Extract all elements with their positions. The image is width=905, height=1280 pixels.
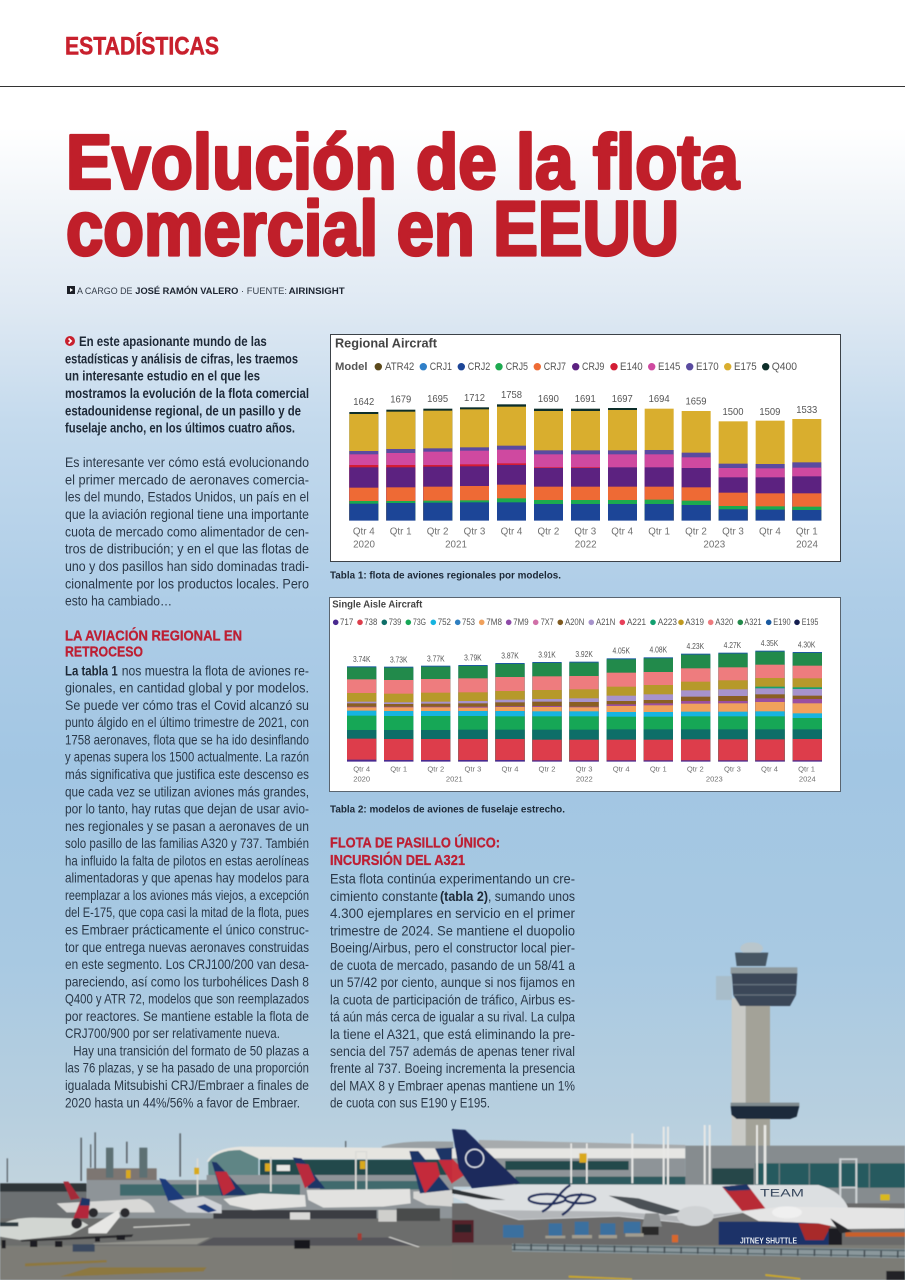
body text: opening paragraph: tros de distribución; y en el que las flotas de — [65, 542, 309, 557]
byline — [67, 285, 345, 297]
body text: regional aviation: más significativa que justifica este descenso es — [65, 767, 309, 782]
legend: A21N — [596, 617, 615, 627]
body text: regional aviation: tor que entrega nuevas aeronaves construidas — [65, 940, 309, 955]
body text: regional aviation: en este segmento. Los CRJ100/200 van desa- — [65, 957, 309, 972]
body text: single aisle: la tiene el A321, que está eliminando la pre- — [330, 1027, 575, 1042]
body text: regional aviation: pareciendo, así como los turbohélices Dash 8 — [65, 974, 309, 989]
panel: regional aircraft chart — [330, 334, 841, 562]
apron surface — [0, 1218, 453, 1280]
body text: regional aviation: gionales, en cantidad global y por modelos. — [65, 681, 309, 696]
legend — [333, 617, 818, 627]
value labels: 3.92K — [575, 650, 593, 659]
legend: 739 — [389, 617, 401, 627]
title: comercial en EEUU — [66, 186, 679, 272]
intro text block: estadounidense regional, de un pasillo y de — [65, 403, 301, 418]
value labels: 1509 — [759, 406, 781, 418]
x axis labels: Qtr 3 — [464, 526, 486, 537]
value labels: 4.35K — [761, 639, 779, 648]
legend: A221 — [627, 617, 646, 627]
stacked bars: regional fleet by quarter — [349, 404, 822, 521]
legend: E140 — [620, 361, 643, 373]
body text: regional aviation: ha influido la falta de pilotos en estas aerolíneas — [65, 853, 309, 868]
value labels: 1712 — [464, 392, 485, 404]
legend: A20N — [565, 617, 584, 627]
body text: opening paragraph: el primer mercado de aeronaves comercia- — [65, 472, 309, 487]
value labels: 1679 — [390, 394, 411, 406]
heading: single aisle: INCURSIÓN DEL A321 — [330, 851, 465, 869]
distant buildings and lights — [0, 1132, 346, 1220]
x axis labels: 2021 — [446, 775, 463, 784]
legend: A223 — [658, 617, 677, 627]
body text: single aisle: frente al 737. Boeing incrementa la presencia — [330, 1061, 575, 1076]
x axis labels: 2024 — [799, 775, 816, 784]
body text: opening paragraph: que la aviación regional tiene una importante — [65, 507, 309, 522]
apron surface — [452, 1203, 905, 1280]
photo text: fuselage and shuttle: JITNEY SHUTTLE — [740, 1236, 798, 1245]
x axis labels: 2022 — [575, 540, 597, 551]
byline: · FUENTE: — [241, 286, 287, 297]
heading: regional aviation: RETROCESO — [65, 644, 143, 661]
x axis labels: Qtr 3 — [724, 765, 741, 774]
x axis labels: Qtr 2 — [685, 526, 707, 537]
body text: regional aviation: las 76 plazas, y se ha pasado de una proporción — [65, 1061, 309, 1076]
body text: single aisle: la cuota de participación de tráfico, Airbus es- — [330, 992, 575, 1007]
legend: CRJ7 — [544, 361, 566, 373]
title: Evolución de la flota — [66, 120, 740, 206]
x axis labels: Qtr 1 — [390, 765, 407, 774]
legend: ATR42 — [385, 361, 414, 373]
body text: single aisle: cimiento constante — [330, 889, 438, 904]
photo: airport apron — [0, 1125, 905, 1280]
byline: AIRINSIGHT — [289, 286, 345, 297]
ground equipment and shuttle — [452, 1220, 905, 1245]
x axis labels: Qtr 4 — [761, 765, 778, 774]
x axis labels: Qtr 2 — [687, 765, 704, 774]
body text: regional aviation: punto álgido en el último trimestre de 2021, con — [65, 715, 309, 730]
x axis labels — [353, 526, 818, 551]
intro text block: En este apasionante mundo de las — [79, 334, 267, 349]
x axis labels: Qtr 4 — [611, 526, 634, 537]
legend: A321 — [744, 617, 762, 627]
chart title: Single Aisle Aircraft — [332, 600, 423, 611]
value labels: 4.23K — [687, 642, 705, 651]
section heading: ESTADÍSTICAS — [65, 32, 219, 61]
heading: single aisle: FLOTA DE PASILLO ÚNICO: — [330, 834, 500, 852]
body text: regional aviation: que cada vez se utilizan aviones más grandes, — [65, 784, 309, 799]
caption: table 1: Tabla 1: flota de aviones regionales por modelos. — [330, 569, 561, 581]
chart title: Regional Aircraft — [335, 335, 438, 350]
x axis labels: Qtr 3 — [722, 526, 744, 537]
regional jet — [722, 1184, 905, 1233]
x axis labels: Qtr 2 — [427, 765, 444, 774]
body text: regional aviation: del E-175, que copa casi la mitad de la flota, pues — [65, 905, 309, 920]
body text: regional aviation: y apenas supera los 1500 actualmente. La razón — [65, 750, 309, 765]
value labels: 1758 — [501, 389, 522, 401]
legend: 717 — [340, 617, 353, 627]
x axis labels: Qtr 4 — [502, 765, 518, 774]
body text: opening paragraph: les del mundo, Estados Unidos, un país en el — [65, 490, 309, 505]
legend: CRJ5 — [506, 361, 528, 373]
x axis labels: Qtr 1 — [648, 526, 670, 537]
body text: regional aviation: es Embraer prácticamente el único construc- — [65, 922, 309, 938]
body text: single aisle: de cuota con sus E190 y E195. — [330, 1096, 490, 1111]
body text: regional aviation — [65, 663, 309, 1110]
photo text: fuselage and shuttle — [740, 1188, 804, 1245]
photo: control tower — [716, 942, 799, 1162]
x axis labels: Qtr 1 — [796, 526, 818, 537]
body text: opening paragraph: Es interesante ver cómo está evolucionando — [65, 455, 309, 470]
heading: single aisle — [330, 834, 500, 869]
legend: 7M9 — [513, 617, 529, 627]
x axis labels: Qtr 2 — [538, 526, 559, 537]
value labels: 1697 — [612, 393, 633, 405]
body text: single aisle: tá aún más cerca de igualar a su rival. La culpa — [330, 1010, 575, 1024]
intro text block: un interesante estudio en el que les — [65, 369, 260, 384]
legend: 73G — [413, 617, 426, 627]
body text: opening paragraph: cuota de mercado como alimentador de cen- — [65, 524, 309, 539]
x axis labels: 2020 — [353, 540, 375, 551]
legend — [335, 361, 797, 373]
value labels — [353, 639, 816, 664]
legend: CRJ1 — [430, 361, 452, 373]
value labels: 1690 — [538, 393, 559, 405]
value labels: 1691 — [575, 393, 596, 405]
body text: regional aviation: por lo tanto, hay rutas que dejan de usar avio- — [65, 802, 309, 816]
value labels: 3.73K — [390, 656, 408, 664]
body text: regional aviation: alimentadoras y que apenas hay modelos para — [65, 871, 309, 886]
body text: single aisle: 4.300 ejemplares en servicio en el primer — [330, 906, 575, 921]
body text: single aisle: trimestre de 2024. Se mantiene el duopolio — [330, 923, 575, 938]
body text: single aisle: , sumando unos — [488, 889, 575, 904]
body text: opening paragraph — [65, 455, 309, 609]
body text: opening paragraph: uno y dos pasillos han sido dominadas tradi- — [65, 559, 309, 574]
legend: 738 — [364, 617, 377, 627]
fence — [512, 1244, 905, 1258]
legend: E175 — [734, 361, 757, 373]
body text: single aisle: del MAX 8 y Embraer apenas mantiene un 1% — [330, 1078, 575, 1094]
legend: 7X7 — [541, 617, 554, 627]
value labels: 3.91K — [538, 650, 556, 660]
stacked bars: single aisle fleet by quarter — [347, 650, 822, 762]
value labels: 4.27K — [724, 641, 742, 650]
body text: single aisle: (tabla 2) — [440, 889, 488, 904]
legend: E195 — [802, 617, 818, 627]
x axis labels: Qtr 4 — [613, 765, 630, 774]
body text: regional aviation: igualada Mitsubishi CRJ/Embraer a finales de — [65, 1078, 309, 1093]
body text: regional aviation: solo pasillo de las familias A320 y 737. También — [65, 836, 309, 851]
photo text: fuselage and shuttle: TEAM — [760, 1188, 804, 1200]
x axis labels: 2021 — [445, 540, 467, 551]
value labels: 1500 — [722, 406, 744, 418]
Skyteam aircraft — [452, 1129, 848, 1227]
terminal — [452, 1125, 905, 1208]
body text: regional aviation: La tabla 1 — [65, 663, 118, 678]
legend: E190 — [773, 617, 791, 627]
x axis labels: Qtr 1 — [390, 526, 412, 537]
legend: 753 — [462, 617, 475, 627]
legend: CRJ2 — [468, 361, 490, 373]
byline: A CARGO DE — [77, 286, 132, 297]
legend: A319 — [685, 617, 704, 627]
value labels: 3.74K — [353, 655, 371, 664]
x axis labels: Qtr 3 — [576, 765, 593, 774]
body text: single aisle: sencia del 757 además de apenas tener rival — [330, 1044, 575, 1059]
value labels: 1694 — [649, 393, 670, 405]
intro text block: mostramos la evolución de la flota comercial — [65, 386, 309, 401]
value labels: 3.77K — [427, 654, 445, 664]
value labels: 3.79K — [464, 654, 482, 662]
body text: regional aviation: 1758 aeronaves, flota que se ha ido desinflando — [65, 732, 309, 747]
background aircraft — [57, 1148, 453, 1222]
body text: regional aviation: reemplazar a los aviones más viejos, a excepción — [65, 888, 309, 903]
body text: regional aviation: 2020 hasta un 44%/56% a favor de Embraer. — [65, 1095, 300, 1110]
body text: regional aviation: por reactores. Se mantiene estable la flota de — [65, 1009, 309, 1024]
value labels: 3.87K — [501, 652, 519, 660]
body text: opening paragraph: esto ha cambiado… — [65, 594, 172, 609]
body text: single aisle: de cuota de mercado, pasando de un 58/41 a — [330, 958, 575, 973]
value labels: 4.05K — [612, 646, 631, 656]
body text: regional aviation: nos muestra la flota de aviones re- — [122, 663, 309, 678]
byline: JOSÉ RAMÓN VALERO — [135, 285, 238, 297]
x axis labels: Qtr 4 — [501, 526, 523, 537]
legend: 7M8 — [486, 617, 502, 627]
body text: single aisle — [330, 872, 575, 1111]
legend: E145 — [658, 361, 680, 373]
x axis labels: Qtr 1 — [650, 765, 667, 774]
legend: 752 — [438, 617, 451, 627]
heading: regional aviation: LA AVIACIÓN REGIONAL EN — [65, 627, 242, 645]
x axis labels: Qtr 1 — [798, 765, 815, 774]
x axis labels: 2020 — [353, 775, 370, 784]
x axis labels: Qtr 3 — [574, 526, 597, 537]
body text: regional aviation: Se puede ver cómo tras el Covid alcanzó su — [65, 698, 309, 713]
value labels: 1659 — [686, 396, 707, 408]
apron right half — [452, 1125, 905, 1280]
x axis labels: 2023 — [703, 540, 726, 551]
legend: Q400 — [772, 361, 797, 373]
legend: Model — [335, 361, 368, 373]
body text: single aisle: Esta flota continúa experimentando un cre- — [330, 872, 575, 887]
heading: regional aviation — [65, 627, 242, 661]
intro text block: estadísticas y análisis de cifras, les traemos — [65, 351, 298, 366]
value labels: 4.30K — [798, 640, 816, 650]
x axis labels — [353, 765, 816, 784]
intro text block — [65, 334, 309, 436]
value labels: 1533 — [796, 404, 817, 416]
caption: table 2: Tabla 2: modelos de aviones de fuselaje estrecho. — [330, 803, 565, 815]
x axis labels: Qtr 4 — [759, 526, 781, 537]
body text: regional aviation: Hay una transición del formato de 50 plazas a — [73, 1044, 309, 1058]
intro text block: fuselaje ancho, en los últimos cuatro años. — [65, 421, 295, 436]
x axis labels: 2023 — [706, 775, 723, 784]
x axis labels: Qtr 4 — [353, 526, 375, 537]
body text: regional aviation: CRJ700/900 por ser relativamente nueva. — [65, 1026, 280, 1041]
apron left half — [0, 1132, 453, 1280]
x axis labels: 2022 — [576, 775, 593, 784]
body text: single aisle: Boeing/Airbus, pero el constructor local pier- — [330, 941, 575, 956]
legend: A320 — [715, 617, 733, 627]
value labels: 4.08K — [650, 646, 668, 654]
x axis labels: Qtr 4 — [353, 765, 370, 774]
title — [66, 120, 740, 272]
value labels: 1642 — [353, 396, 374, 408]
x axis labels: Qtr 3 — [464, 765, 481, 774]
x axis labels: Qtr 2 — [427, 526, 448, 537]
x axis labels: Qtr 2 — [539, 765, 555, 774]
legend: CRJ9 — [582, 361, 604, 373]
body text: regional aviation: nes regionales y se pasan a aeronaves de un — [65, 819, 309, 834]
panel: single aisle chart — [329, 597, 841, 792]
body text: opening paragraph: cionalmente por los productos locales. Pero — [65, 576, 309, 591]
body text: regional aviation: Q400 y ATR 72, modelos que son reemplazados — [65, 992, 309, 1007]
regional jets — [0, 1198, 133, 1248]
terminal — [87, 1141, 453, 1220]
value labels: 1695 — [427, 393, 448, 405]
body text: single aisle: un 57/42 por ciento, aunque si nos fijamos en — [330, 975, 575, 990]
x axis labels: 2024 — [796, 540, 818, 551]
legend: E170 — [696, 361, 719, 373]
value labels — [353, 389, 817, 418]
